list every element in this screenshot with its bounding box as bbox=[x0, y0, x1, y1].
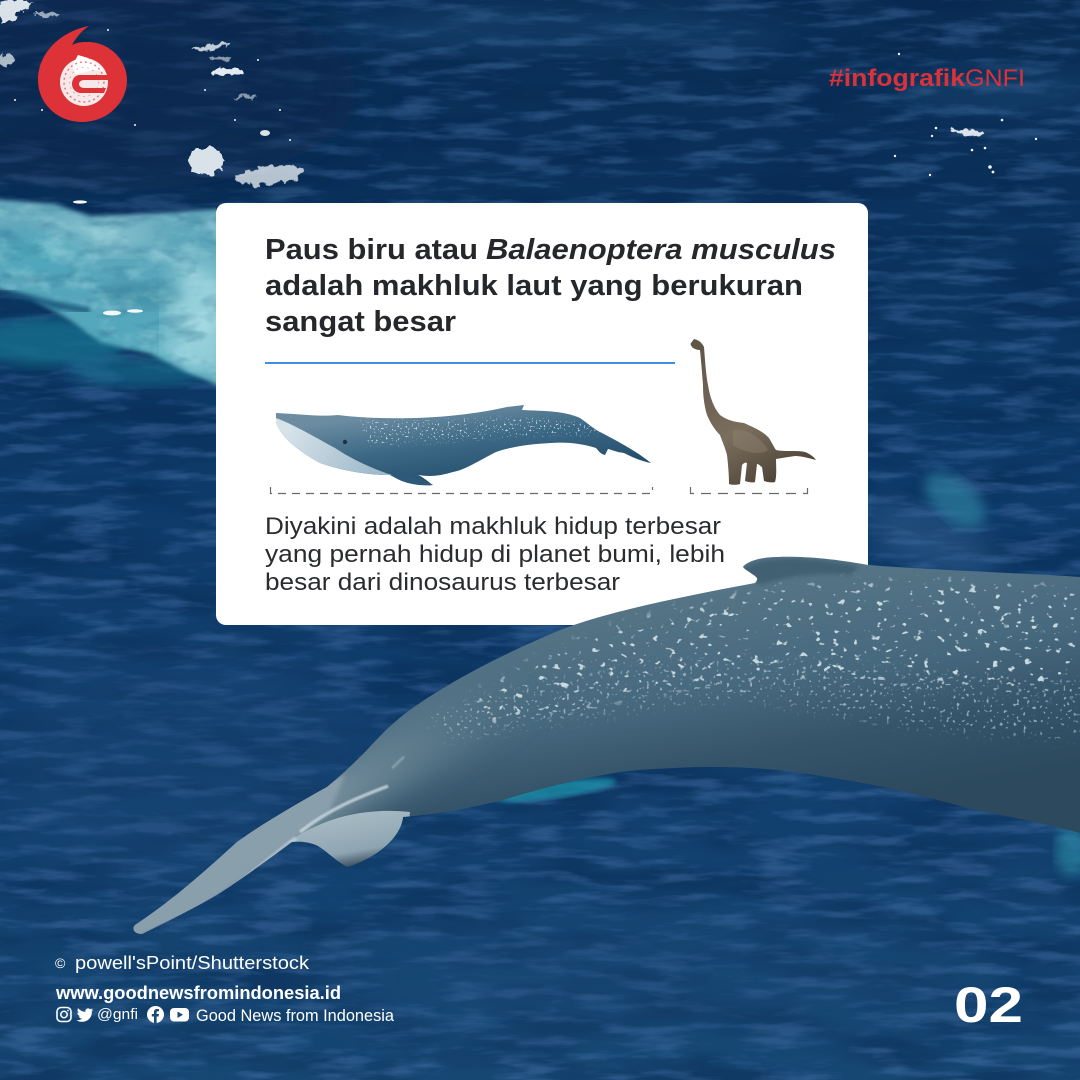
icon: facebook bbox=[147, 1006, 164, 1023]
illustration: large blue whale body overlapping card bbox=[120, 540, 1080, 945]
card heading bbox=[265, 234, 836, 338]
dinosaur length bracket bbox=[690, 487, 808, 494]
card heading: Balaenoptera musculus bbox=[486, 234, 836, 266]
underwater whale foam at left bbox=[0, 196, 216, 389]
illustration: blue whale bbox=[276, 405, 651, 486]
whale dorsal fin bbox=[740, 558, 860, 585]
whale fine speckles bbox=[428, 654, 1080, 745]
whale body shading bbox=[308, 556, 1080, 862]
icon: youtube bbox=[170, 1008, 189, 1022]
card heading: sangat besar bbox=[265, 306, 456, 338]
card body text: Diyakini adalah makhluk hidup terbesar bbox=[265, 513, 721, 540]
whale tail lighter section bbox=[134, 705, 478, 934]
whale skin speckles bbox=[464, 574, 1080, 730]
card body text: besar dari dinosaurus terbesar bbox=[265, 569, 620, 596]
handle text: @gnfi bbox=[97, 1006, 138, 1023]
photo credit: © bbox=[55, 955, 66, 971]
card body text bbox=[265, 513, 725, 596]
icon: instagram bbox=[57, 1008, 71, 1022]
card heading: Paus biru atau bbox=[265, 234, 478, 266]
whale fluke fin bbox=[288, 810, 410, 867]
icon: twitter bbox=[76, 1008, 93, 1022]
hashtag label: GNFI bbox=[965, 65, 1025, 92]
whale length bracket bbox=[270, 487, 652, 494]
card heading: adalah makhluk laut yang berukuran bbox=[265, 270, 803, 302]
illustration: brachiosaurus bbox=[691, 339, 816, 485]
underwater whale glow at right bbox=[492, 462, 1080, 876]
photo credit: powell'sPoint/Shutterstock bbox=[75, 953, 310, 973]
panel: white info card bbox=[216, 203, 868, 625]
divider line bbox=[265, 362, 675, 364]
card body text: yang pernah hidup di planet bumi, lebih bbox=[265, 541, 725, 568]
brand name text: Good News from Indonesia bbox=[196, 1006, 395, 1025]
logo: GNFI red speech mark with eagle G bbox=[38, 26, 127, 122]
sea foam patches bbox=[0, 0, 1037, 188]
page number: 02 bbox=[954, 977, 1023, 1033]
whale tail streaks bbox=[232, 756, 405, 886]
hashtag label bbox=[829, 65, 1025, 92]
website address: www.goodnewsfromindonesia.id bbox=[55, 982, 341, 1003]
social media row bbox=[57, 1006, 395, 1025]
hashtag label: #infografik bbox=[829, 65, 966, 92]
